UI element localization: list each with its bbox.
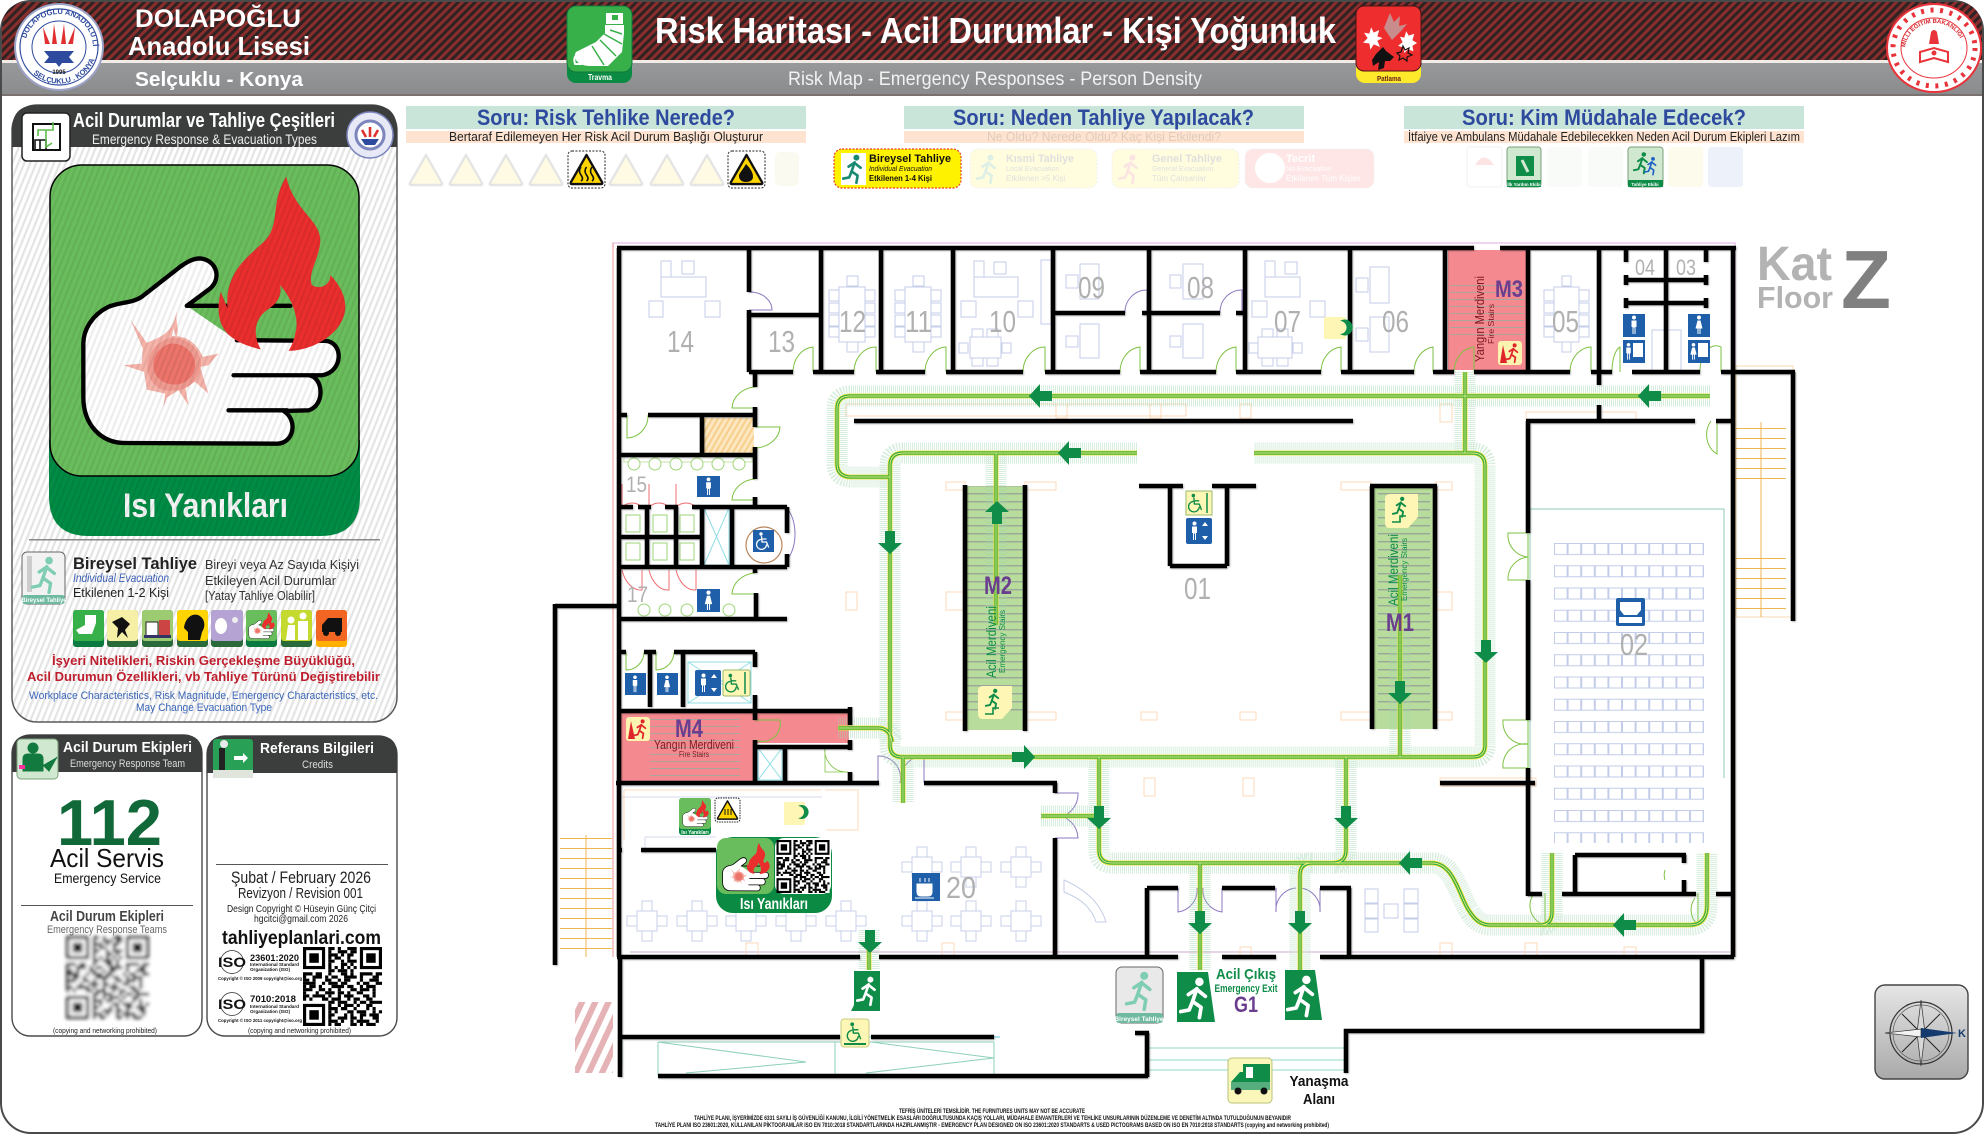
evacuation description: [Yatay Tahliye Olabilir] (205, 588, 315, 603)
room numbers: 01 (1184, 571, 1211, 606)
floor number: Floor (1757, 280, 1833, 315)
sign: lift center (1186, 518, 1212, 544)
revision details: Şubat / February 2026 (231, 868, 371, 887)
english note: Workplace Characteristics, Risk Magnitude, Emergency Characteristics, etc. (29, 690, 378, 702)
room numbers: 07 (1274, 304, 1301, 339)
active tile: individual evacuation (834, 149, 961, 188)
room numbers (626, 255, 1696, 905)
hazard sign row (410, 151, 799, 188)
panel: emergency response team (12, 735, 202, 1036)
faded tiles (970, 149, 1374, 188)
walls (555, 248, 1795, 1077)
evacuation description: Bireyi veya Az Sayıda Kişiyi (205, 557, 359, 572)
compass (1875, 985, 1968, 1079)
stair M3 labels: Fire Stairs (1487, 304, 1496, 344)
stair M4 labels: Fire Stairs (679, 750, 709, 759)
QR sticker: heat burns: Isı Yanıkları (740, 896, 808, 913)
question: risk location: Bertaraf Edilemeyen Her Risk Acil Durum Başlığı Oluşturur (449, 130, 763, 144)
ISO 23601: ISO (218, 954, 246, 970)
hatched service area (575, 1002, 613, 1073)
response team icons (1467, 147, 1743, 187)
service english: Emergency Service (54, 871, 161, 886)
active team: first aid (1507, 147, 1541, 187)
evacuation type text: Etkilenen 1-2 Kişi (73, 585, 169, 600)
stair M4 labels: M4 (675, 715, 703, 743)
stair M4 fill (621, 713, 849, 781)
website: tahliyeplanlari.com (222, 928, 381, 949)
site outlines (613, 243, 1735, 1076)
room numbers: 09 (1078, 270, 1105, 305)
icon: trauma (567, 6, 632, 83)
subtitle: Risk Map - Emergency Responses - Person Density (788, 69, 1202, 90)
room numbers: 10 (989, 304, 1016, 339)
emergency exit label: Acil Çıkış (1216, 966, 1276, 983)
footer notes: TAHLİYE PLANI ISO 23601:2020, KULLANILAN PİKTOGRAMLAR ISO EN 7010:2018 STANDARTLARINDA HAZIRLANMIŞTIR - EMERGENCY PLAN DESIGNED ON ISO 23601:2020 STANDARTS & USED PICTOGRAMS BASED ON ISO EN 7010:2018 STANDARTS (copying and networking prohibited) (655, 1122, 1329, 1129)
panel heading: Referans Bilgileri (260, 740, 374, 757)
route direction arrows (858, 384, 1661, 953)
revision details: Design Copyright © Hüseyin Günç Çitçi (227, 903, 376, 915)
floor number (1757, 233, 1891, 326)
icon: credits exit (213, 739, 253, 778)
exit sign: west (1177, 972, 1215, 1022)
sign: changing man right (1623, 340, 1645, 363)
emergency icon row (73, 610, 347, 647)
sign: accessible WC (753, 530, 774, 552)
revision details: Revizyon / Revision 001 (238, 886, 363, 902)
hazard sign in kitchen (679, 798, 711, 836)
panel subheading: Emergency Response Team (70, 758, 185, 770)
faded tiles: Genel Tahliye (1152, 153, 1222, 165)
icon: individual evacuation: Bireysel Tahliye (21, 598, 67, 604)
stair M3 fill (1448, 250, 1527, 370)
footer notes: TAHLİYE PLANI, İŞYERİMİZDE 6331 SAYILI İŞ GÜVENLİĞİ KANUNU, İLGİLİ YÖNETMELİK ESASLARI DOĞRULTUSUNDA KAÇIŞ YOLLARI, MÜDAHALE ENVANTERLERİ VE TEHLİKE UNSURLARININ DÜZENLEME VE DENETİM ALTINDA TUTULDUĞUNUN BEYANIDIR (694, 1114, 1292, 1122)
hero sign: heat burns (49, 165, 360, 536)
faded tiles: Etkilenen Tüm Kişiler (1286, 174, 1361, 183)
sign: accessible lift center (1186, 491, 1212, 515)
QR code blurred (66, 936, 149, 1019)
revision details (227, 868, 376, 925)
icon: burned hand with flame (83, 177, 345, 444)
emergency exit label (1214, 966, 1278, 1017)
faded tiles: General Evacuation (1152, 166, 1214, 173)
sign: fire stair (626, 717, 650, 741)
hazard triangle in kitchen (715, 798, 740, 822)
copy note: (copying and networking prohibited) (53, 1026, 157, 1035)
room numbers: 02 (1620, 627, 1648, 662)
footer notes: TEFRİŞ ÜNİTELERİ TEMSİLİDİR. THE FURNITURES UNITS MAY NOT BE ACCURATE (899, 1108, 1085, 1115)
room numbers: 05 (1552, 304, 1579, 339)
panel subheading: Emergency Response & Evacuation Types (92, 131, 317, 147)
ISO 23601: Copyright © ISO 2009 copyright@iso.org (218, 975, 302, 981)
sign: WC woman lower left (657, 673, 678, 695)
sign: first aid crescent (1324, 317, 1353, 339)
school name (128, 4, 310, 91)
elevator shafts (688, 508, 782, 780)
sign: cafe (912, 873, 940, 901)
icon: response team (17, 739, 58, 779)
ministry logo: MİLLİ EĞİTİM BAKANLIĞI (1901, 18, 1964, 47)
room numbers: 11 (905, 304, 932, 339)
stair M1 labels (1385, 494, 1418, 637)
warning text: İşyeri Nitelikleri, Riskin Gerçekleşme Büyüklüğü, (52, 653, 355, 668)
orange column outlines (624, 404, 1636, 958)
sign: fire stair (1498, 341, 1522, 365)
QR code (303, 947, 382, 1026)
evacuation type text (73, 554, 197, 600)
warning text (27, 653, 380, 684)
emergency exit label: Emergency Exit (1214, 983, 1278, 995)
evacuation type text: Bireysel Tahliye (73, 554, 197, 573)
header band (2, 2, 1982, 96)
teams heading: Acil Durum Ekipleri (50, 909, 164, 925)
sign: WC woman right (1688, 314, 1710, 337)
sign label: Isı Yanıkları (123, 487, 288, 525)
emergency number: 112 (57, 786, 162, 859)
school logo (14, 3, 104, 91)
faded tiles: No Evacuation (1286, 166, 1332, 173)
sign: lift blue (695, 670, 721, 696)
stair M2 labels: M2 (984, 572, 1012, 600)
panel heading: Acil Durumlar ve Tahliye Çeşitleri (73, 110, 335, 132)
ISO 23601: 23601:2020 (250, 953, 299, 964)
curved lounge seat (1064, 880, 1106, 922)
english note: May Change Evacuation Type (136, 702, 272, 714)
small school logo (347, 112, 393, 158)
room numbers: 08 (1187, 270, 1214, 305)
QR sticker: heat burns (716, 837, 832, 913)
room numbers: 06 (1382, 304, 1409, 339)
question: who responds (1404, 105, 1804, 144)
auditorium seating (1554, 543, 1704, 843)
sign: ambulance (1228, 1058, 1272, 1103)
floor plan (555, 243, 1795, 1108)
ISO 7010: 7010:2018 (250, 994, 296, 1005)
sign: kitchen first aid (784, 802, 809, 825)
room numbers: 14 (667, 324, 694, 359)
panel header (12, 105, 397, 147)
ISO 7010: Copyright © ISO 2011 copyright@iso.org (218, 1017, 302, 1023)
icon: explosion: Patlama (1377, 76, 1401, 83)
stair M2 labels: Acil Merdiveni (983, 606, 999, 678)
evacuation description (205, 557, 359, 603)
room numbers: 17 (627, 582, 648, 607)
revision details: hgcitci@gmail.com 2026 (254, 913, 348, 925)
stair M2 labels: Emergency Stairs (998, 610, 1007, 673)
room numbers: 15 (626, 472, 647, 497)
service label: Acil Servis (50, 843, 164, 873)
sign: WC man upper (697, 476, 720, 497)
ISO 23601: International Standard (250, 962, 299, 967)
individual evacuation tile on plan (1114, 967, 1164, 1023)
question: risk location: Soru: Risk Tehlike Nerede? (477, 105, 735, 130)
warning text: Acil Durumun Özellikleri, vb Tahliye Türünü Değiştirebilir (27, 669, 380, 684)
floor number: Kat (1757, 238, 1832, 291)
evacuation route halo (837, 372, 1710, 970)
stair M4 labels: Yangın Merdiveni (654, 737, 734, 752)
sign: emergency stair (1385, 494, 1418, 528)
faded tiles: Tüm Çalışanlar (1152, 174, 1207, 183)
active tile: individual evacuation: Etkilenen 1-4 Kişi (869, 174, 932, 183)
footer notes (655, 1108, 1329, 1129)
active hazard: hot surface (568, 151, 605, 188)
stair M3 labels: M3 (1495, 276, 1523, 303)
assembly area label: Yanaşma (1290, 1073, 1349, 1090)
stair M1 fill (1372, 486, 1435, 729)
ISO 7010: Organization (ISO) (250, 1009, 290, 1014)
toilet fixtures (624, 455, 752, 616)
school logo: SELÇUKLU . KONYA (34, 59, 94, 84)
assembly area label: Alanı (1303, 1091, 1335, 1108)
icon: trauma: Travma (588, 73, 612, 82)
exit sign: cafe (851, 971, 880, 1011)
icon: individual evacuation (21, 552, 67, 604)
ministry logo (1886, 3, 1982, 93)
stair M2 labels (978, 572, 1012, 719)
sign: accessible exit (841, 1019, 869, 1047)
sign: WC woman upper (697, 589, 720, 612)
exit sign: east (1285, 970, 1322, 1020)
ISO 7010: International Standard (250, 1004, 299, 1009)
stair M4 labels (626, 715, 734, 759)
outer fire stairs (560, 366, 1793, 957)
active team: first aid: İlk Yardım Ekibi (1507, 181, 1541, 187)
active tile: individual evacuation: Individual Evacuation (869, 166, 932, 173)
room numbers: 13 (768, 324, 795, 359)
stair M3 labels (1472, 276, 1523, 365)
school name: DOLAPOĞLU (135, 4, 301, 33)
english note (29, 690, 378, 714)
question: who responds: Soru: Kim Müdahale Edecek? (1462, 105, 1746, 130)
floor number: Z (1841, 233, 1891, 326)
evacuation description: Etkileyen Acil Durumlar (205, 573, 337, 588)
active team: evacuation: Tahliye Ekibi (1631, 182, 1659, 187)
individual evacuation tile on plan: Bireysel Tahliye (1114, 1016, 1164, 1023)
faded tiles: Tecrit (1286, 153, 1315, 165)
school logo: 1995 (52, 70, 66, 76)
cafe tables (627, 847, 1041, 941)
stair M1 labels: M1 (1386, 609, 1414, 637)
active team: evacuation (1628, 147, 1663, 187)
doors (626, 346, 1721, 925)
stair M3 labels: Yangın Merdiveni (1472, 276, 1487, 362)
sign: WC man lower left (625, 673, 646, 695)
panel: credits (207, 736, 397, 1036)
room numbers: 12 (839, 304, 866, 339)
ISO 7010: ISO (218, 996, 246, 1012)
panel subheading: Credits (302, 759, 333, 771)
emergency exit label: G1 (1234, 992, 1258, 1017)
sign: accessible lift (723, 670, 750, 696)
faded tiles: Etkilenen >5 Kişi (1006, 174, 1066, 183)
room numbers: 20 (946, 870, 976, 905)
faded tiles: Kısmi Tahliye (1006, 153, 1074, 165)
ISO 7010 (218, 992, 302, 1023)
accessible WC circle (746, 527, 782, 563)
title: Risk Haritası - Acil Durumlar - Kişi Yoğunluk (655, 10, 1337, 51)
stair M1 labels: Emergency Stairs (1400, 538, 1409, 601)
question: who responds: İtfaiye ve Ambulans Müdahale Edebilecekken Neden Acil Durum Ekipleri Lazım (1408, 130, 1800, 144)
question: why evacuate: Soru: Neden Tahliye Yapılacak? (953, 105, 1254, 130)
ISO 23601: Organization (ISO) (250, 967, 290, 972)
faded tiles: Local Evacuation (1006, 166, 1059, 173)
panel heading: Acil Durum Ekipleri (63, 739, 192, 756)
school name: Selçuklu - Konya (135, 69, 304, 91)
active tile: individual evacuation: Bireysel Tahliye (869, 153, 951, 165)
evacuation route (837, 372, 1710, 970)
evacuation type text: Individual Evacuation (73, 571, 169, 585)
question: risk location (406, 105, 806, 144)
panel: emergency and evacuation types (12, 105, 397, 722)
stair M2 fill (965, 486, 1025, 730)
stair M1 labels: Acil Merdiveni (1385, 534, 1401, 606)
school name: Anadolu Lisesi (128, 31, 310, 61)
teams subheading: Emergency Response Teams (47, 924, 167, 936)
sign: auditorium (1616, 598, 1645, 626)
sign: emergency stair (978, 686, 1012, 719)
icon: explosion (1356, 6, 1421, 83)
furniture (649, 260, 1681, 932)
sign: WC man right (1623, 314, 1645, 337)
sign: changing woman right (1688, 340, 1710, 363)
assembly area label (1290, 1073, 1349, 1108)
evacuation type tiles (834, 149, 1374, 188)
question: why evacuate: Ne Oldu? Nerede Oldu? Kaç Kişi Etkilendi? (987, 130, 1221, 144)
room numbers: 03 (1676, 255, 1696, 280)
active hazard: flammable (728, 151, 765, 188)
ISO 23601 (218, 950, 302, 981)
storage hatch (704, 418, 754, 454)
copy note: (copying and networking prohibited) (248, 1026, 351, 1035)
icon: floor plan (22, 113, 70, 161)
hazard sign in kitchen: Isı Yanıkları (681, 830, 709, 836)
question: why evacuate (904, 105, 1304, 144)
north marker: K (1958, 1028, 1966, 1040)
room numbers: 04 (1635, 255, 1655, 280)
